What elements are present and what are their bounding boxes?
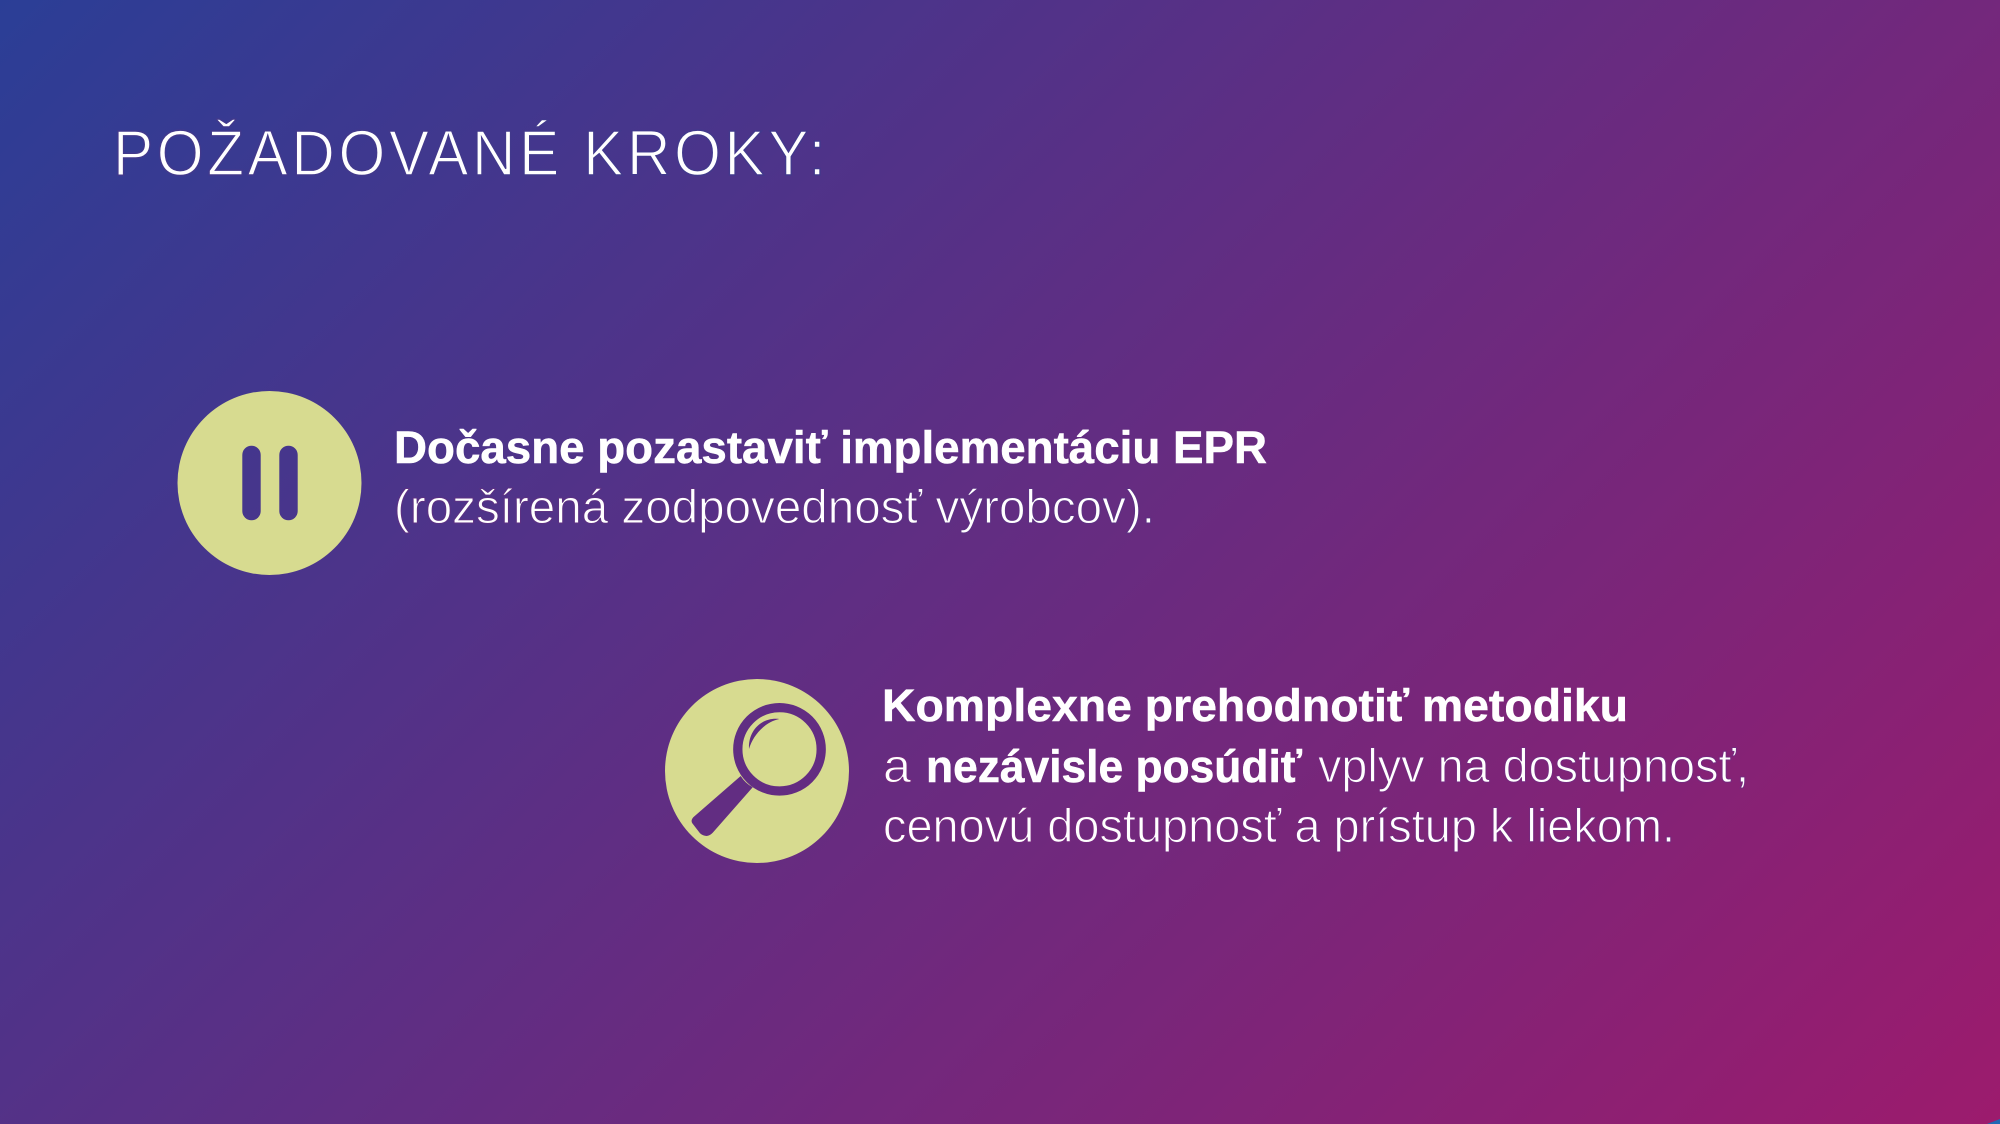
step 2 second line: vplyv na dostupnosť,: [1318, 739, 1749, 792]
step 1 bold heading: Dočasne pozastaviť implementáciu EPR: [394, 422, 1267, 473]
title: POŽADOVANÉ KROKY:: [113, 118, 826, 189]
icon: magnifying glass: [665, 679, 849, 863]
step 1 description: (rozšírená zodpovednosť výrobcov).: [394, 480, 1155, 533]
step 2 second line: [883, 739, 1749, 792]
icon: pause: [178, 391, 362, 575]
step 2 second line: a: [883, 739, 912, 792]
step 2: reassess methodology: [665, 679, 1749, 863]
step 2 bold heading: Komplexne prehodnotiť metodiku: [882, 680, 1628, 731]
corner accent: [1987, 1119, 2000, 1124]
step 2 text: [882, 680, 1749, 852]
step 1: pause EPR: [178, 391, 1267, 575]
step 2 second line: nezávisle posúdiť: [926, 741, 1302, 792]
step 1 text: [394, 422, 1267, 533]
step 2 third line: cenovú dostupnosť a prístup k liekom.: [883, 799, 1675, 852]
